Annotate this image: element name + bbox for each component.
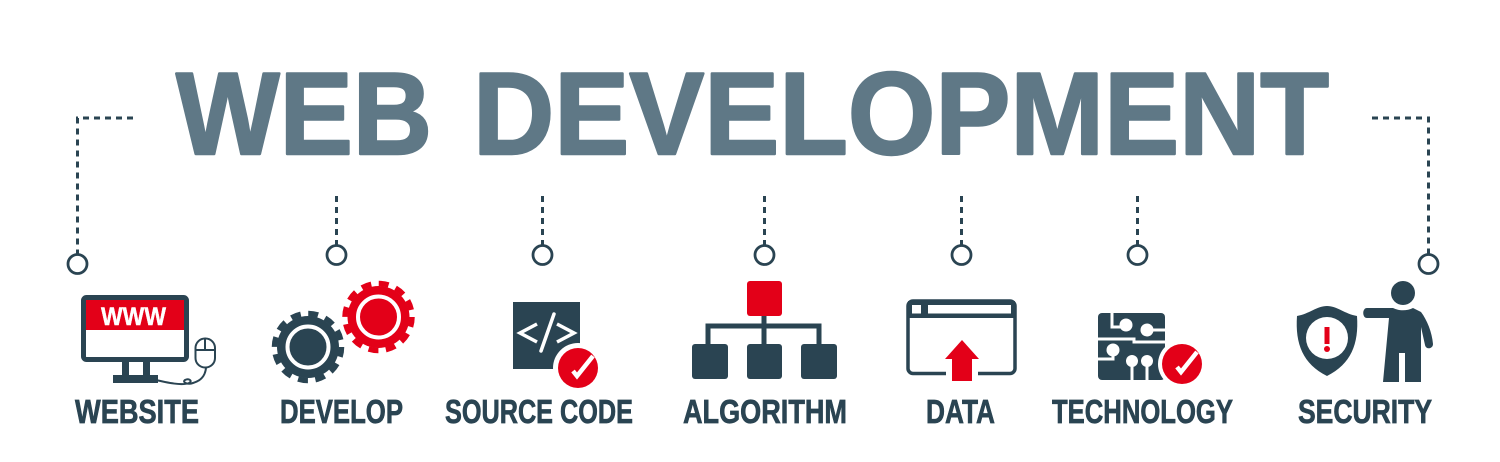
icon: website monitor and mouse: [84, 298, 215, 384]
title: DEVELOPMENT: [473, 48, 1329, 179]
icon: security shield and person: [1297, 281, 1433, 382]
connector: technology: [1128, 196, 1147, 264]
icon: source code: [513, 302, 603, 393]
label: source code: SOURCE CODE: [445, 393, 633, 430]
icon: technology circuit: [1098, 313, 1206, 388]
label: algorithm: ALGORITHM: [683, 393, 847, 430]
connector: website: [68, 118, 133, 274]
connector: algorithm: [755, 196, 774, 264]
icon: gears: [274, 284, 412, 380]
label: website: WEBSITE: [75, 393, 199, 430]
icon: algorithm: [692, 281, 837, 379]
connector: develop: [327, 196, 346, 264]
label: security: SECURITY: [1298, 393, 1432, 430]
connector: security: [1372, 118, 1438, 274]
connector: source code: [533, 196, 552, 264]
icon: website monitor and mouse: WWW: [101, 303, 166, 331]
label: data: DATA: [926, 393, 995, 430]
title: WEB: [176, 48, 432, 179]
label: develop: DEVELOP: [280, 393, 403, 430]
icon: data window: [908, 301, 1015, 381]
connector: data: [952, 196, 971, 264]
label: technology: TECHNOLOGY: [1052, 393, 1233, 430]
